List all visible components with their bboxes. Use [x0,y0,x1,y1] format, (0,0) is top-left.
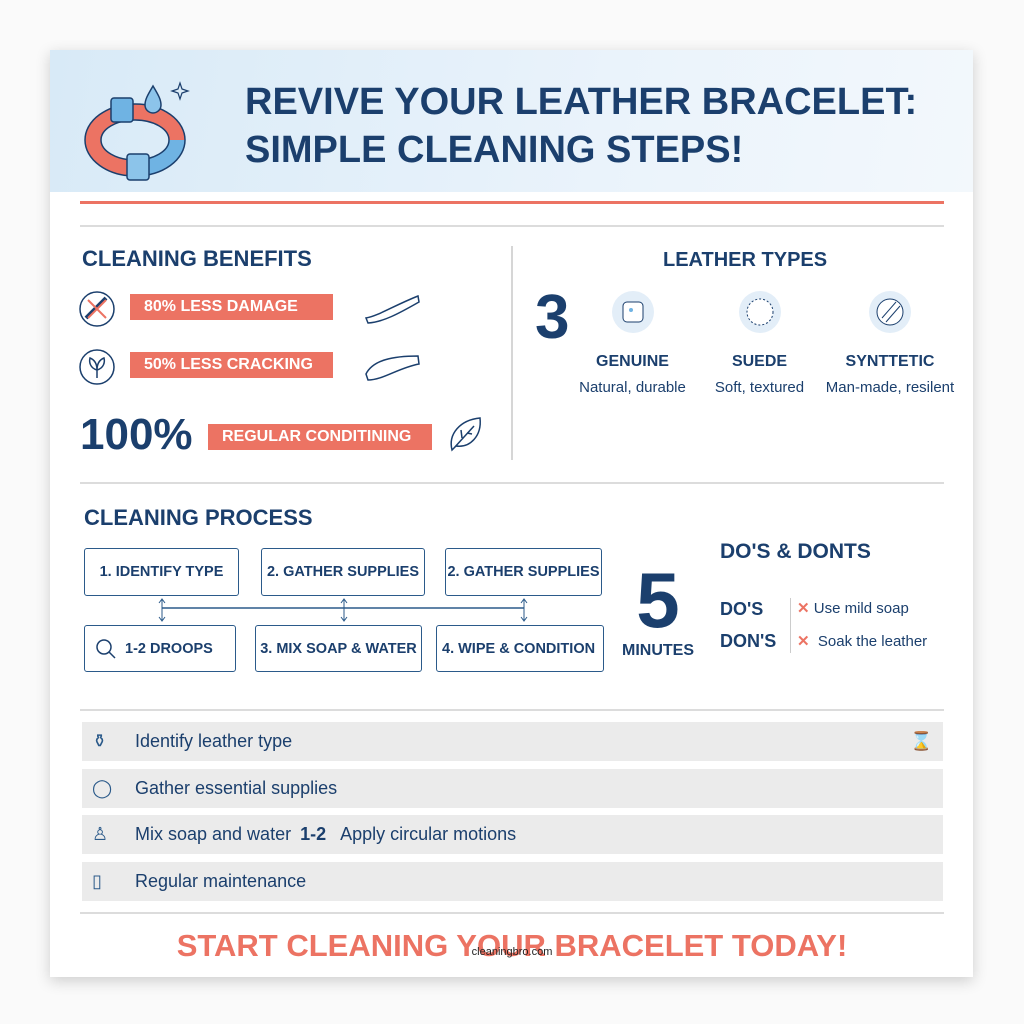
panel: cleaning benefits [79,246,481,459]
panel: dos and donts: DON'S [720,631,776,651]
step list: Identify leather type [135,731,292,751]
step list: Gather essential supplies [135,778,337,798]
panel: cleaning process [84,505,604,672]
type: synthetic: SYNTTETIC [846,353,934,370]
panel: dos and donts: ✕ Soak the leather [797,633,927,650]
icon: no damage [79,291,115,327]
step boxes [84,548,239,596]
step list: ⚱ [92,731,107,751]
heading: CLEANING BENEFITS [82,246,312,271]
icon: leaf [450,417,481,452]
panel: dos and donts: DO'S & DONTS [720,540,871,563]
step list: ◯ [92,778,112,798]
step list [82,722,943,901]
connector arrows [158,598,528,622]
panel: dos and donts: ✕ Use mild soap [797,600,909,617]
stat: 5 minutes: 5 [636,556,680,644]
panel: dos and donts: DO'S [720,599,763,619]
step list: ⌛ [910,731,932,751]
header band [50,50,973,192]
stat: 5 minutes: MINUTES [622,642,694,659]
panel: cleaning process: 3. MIX SOAP & WATER [260,640,417,656]
step list: ▯ [92,871,102,891]
bar: 80% [130,294,333,320]
title [245,81,917,171]
title: REVIVE YOUR LEATHER BRACELET: [245,81,917,123]
panel: cleaning process: 4. WIPE & CONDITION [442,640,595,656]
panel: cleaning process: 1-2 DROOPS [125,640,213,656]
step list: ♙ [92,824,108,844]
bar: 50%: 50% LESS CRACKING [144,356,313,373]
type: synthetic [826,291,954,396]
panel: leather types [535,249,954,396]
number 3: 3 [535,283,569,352]
bar: 50% [130,352,333,378]
type: genuine: GENUINE [596,353,669,370]
panel: cleaning process: 2. GATHER SUPPLIES [267,564,419,580]
icon: cracked strap [365,355,420,381]
panel: dos and donts [720,540,927,653]
stat: 5 minutes [622,556,694,659]
type: suede: Soft, textured [715,379,804,396]
type: suede: SUEDE [732,353,787,370]
bar: conditioning [208,424,432,450]
type: synthetic: Man-made, resilent [826,379,954,396]
step boxes: 1. IDENTIFY TYPE [100,564,223,580]
bar: 80%: 80% LESS DAMAGE [144,298,298,315]
icon: strap [365,295,420,324]
type: suede [715,291,804,396]
icon: bracelet [84,81,190,181]
title: SIMPLE CLEANING STEPS! [245,129,743,171]
heading: LEATHER TYPES [663,249,827,271]
heading: CLEANING PROCESS [84,505,313,530]
type: genuine: Natural, durable [579,379,686,396]
panel: cleaning process: 2. GATHER SUPPLIES [447,564,600,580]
step list: Regular maintenance [135,871,306,891]
icon: leaf circle [79,349,115,385]
100% stat: 100% [80,410,193,459]
step list: 1-2 [300,824,326,844]
bar: conditioning: REGULAR CONDITINING [222,428,411,445]
text: cleaningbro.com [472,946,552,958]
footer call to action: START CLEANING YOUR BRACELET TODAY! [177,928,847,963]
step list: Mix soap and water Apply circular motions [135,824,516,844]
type: genuine [579,291,686,396]
